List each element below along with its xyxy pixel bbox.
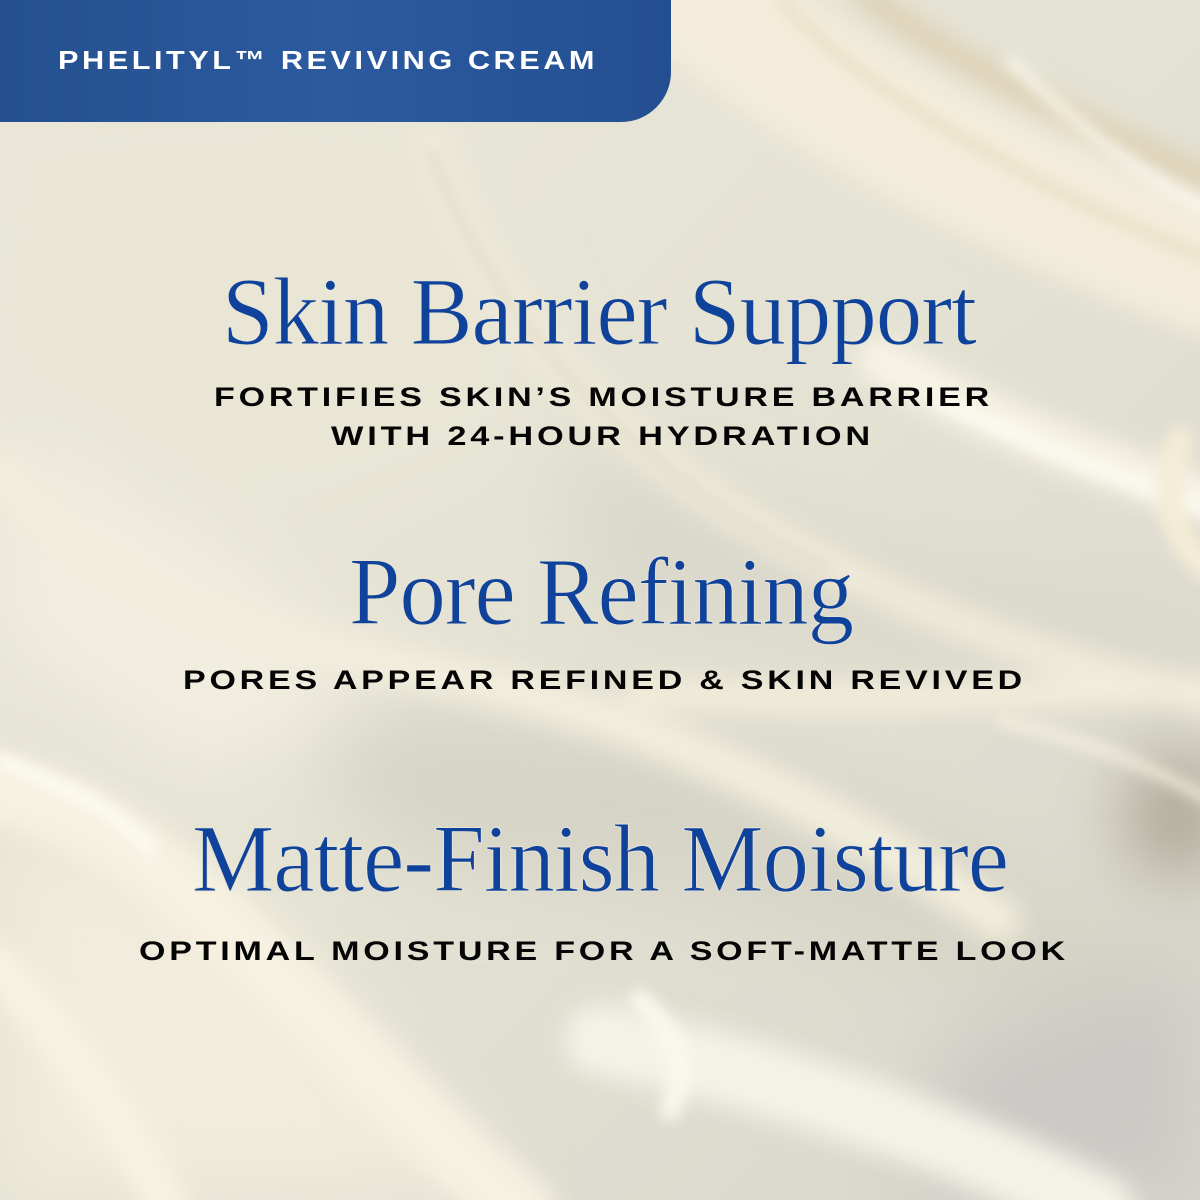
header tab — [0, 0, 671, 122]
description: skin barrier: WITH 24-HOUR HYDRATION — [331, 421, 874, 451]
heading: Skin Barrier Support: Skin Barrier Support — [222, 258, 977, 365]
heading: Matte-Finish Moisture: Matte-Finish Moisture — [192, 805, 1008, 912]
header tab title: PHELITYL™ REVIVING CREAM — [58, 45, 598, 75]
description: skin barrier — [214, 382, 993, 451]
description: skin barrier: FORTIFIES SKIN’S MOISTURE BARRIER — [214, 382, 993, 412]
heading: Pore Refining: Pore Refining — [349, 538, 853, 645]
description: pore refining: PORES APPEAR REFINED & SKIN REVIVED — [183, 665, 1026, 695]
description: matte-finish moisture: OPTIMAL MOISTURE FOR A SOFT-MATTE LOOK — [139, 936, 1069, 966]
